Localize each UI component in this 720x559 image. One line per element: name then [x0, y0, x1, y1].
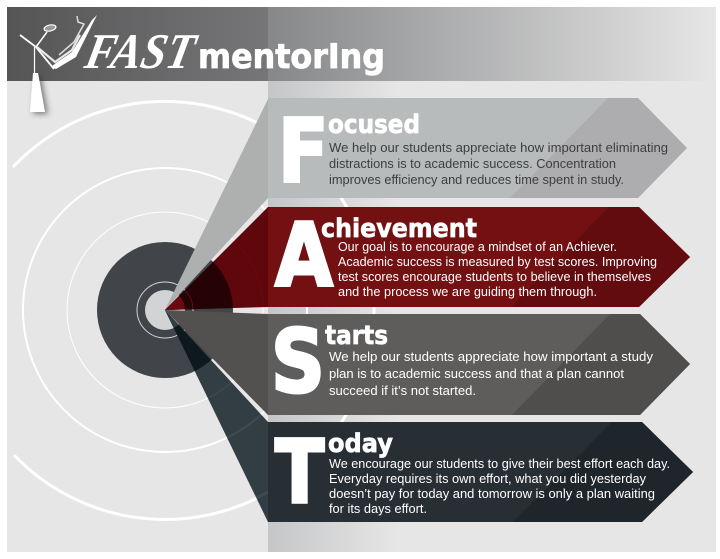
target rings: [13, 101, 374, 520]
panel: Starts: [268, 313, 690, 415]
body text: achievement: Our goal is to encourage a mindset of an Achiever.: [338, 239, 617, 254]
body text: focused: improves efficiency and reduces time spent in study.: [329, 172, 624, 187]
title: tarts: tarts: [325, 321, 388, 351]
body text: today: for its days effort.: [329, 501, 427, 516]
wedge: achievement: [165, 207, 268, 310]
logo: graduation cap checkmark and tassel: [20, 15, 97, 112]
title: oday: oday: [328, 429, 393, 459]
panel: Achievement: [268, 206, 690, 307]
body text: starts: We help our students appreciate how important a study: [329, 349, 653, 364]
panel: Today: [268, 422, 693, 523]
body text: focused: [329, 140, 668, 187]
body text: achievement: and the process we are guiding them through.: [338, 284, 597, 299]
letter T: T: [275, 422, 325, 523]
body text: today: Everyday requires its own effort, what you did yesterday: [329, 471, 646, 486]
panel: Focused: [268, 98, 687, 203]
header band: [7, 7, 716, 81]
wedge: today: [165, 310, 268, 522]
body text: today: doesn’t pay for today and tomorrow is only a plan waiting: [329, 486, 655, 501]
title: ocused: ocused: [328, 110, 420, 140]
wedge: focused: [165, 99, 268, 310]
logo wordmark: FAST: FAST: [80, 23, 202, 79]
body text: focused: We help our students appreciate how important eliminating: [329, 140, 668, 155]
target centre disc: [97, 242, 233, 378]
heading: mentorIng: mentorIng: [198, 37, 385, 77]
body text: starts: plan is to academic success and that a plan cannot: [329, 366, 624, 381]
body text: achievement: test scores encourage students to believe in themselves: [338, 269, 651, 284]
title: chievement: chievement: [321, 214, 477, 244]
body text: achievement: Academic success is measured by test scores. Improving: [338, 254, 657, 269]
body text: focused: distractions is to academic success. Concentration: [329, 156, 616, 171]
letter F: F: [278, 102, 329, 203]
body text: achievement: [338, 239, 657, 299]
body text: today: We encourage our students to give their best effort each day.: [329, 456, 670, 471]
letter A: A: [275, 206, 333, 307]
wedge: starts: [165, 310, 268, 415]
body text: today: [329, 456, 670, 516]
body text: starts: [329, 349, 653, 398]
body text: starts: succeed if it’s not started.: [329, 383, 476, 398]
letter S: S: [271, 313, 325, 413]
